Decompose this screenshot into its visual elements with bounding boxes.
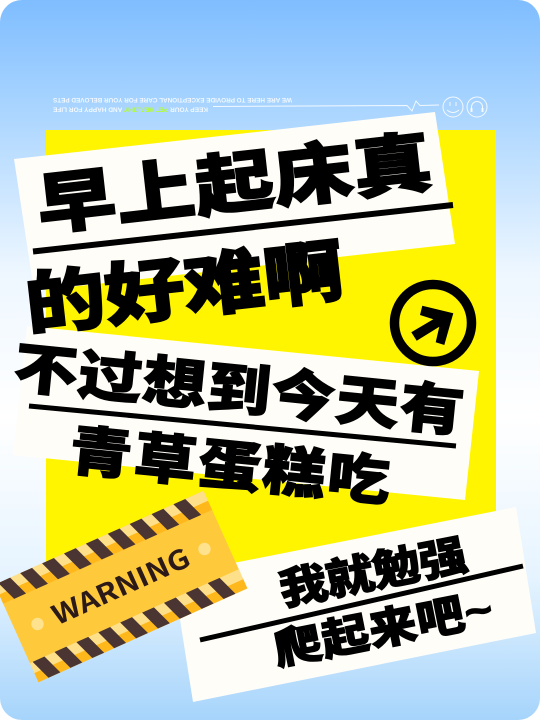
heading: 青草蛋糕吃: 青草蛋糕吃 (67, 421, 393, 513)
bottom hazard band (30, 569, 247, 682)
paper: middle (13, 326, 479, 500)
tagline: healthy pet: KEEP YOUR PET HEALTHY AND HAPPY FOR LIFE (52, 105, 208, 112)
heading: 我就勉强: 我就勉强 (275, 530, 471, 615)
icon: headphones (467, 97, 487, 117)
paper: bottom (173, 507, 536, 702)
rivet right (196, 541, 213, 557)
upside-down tagline strip (52, 96, 487, 117)
rivet left (29, 616, 46, 632)
heartbeat line (213, 101, 439, 111)
yellow panel (46, 130, 496, 600)
warning sign (0, 491, 247, 682)
heading: 的好难啊: 的好难啊 (22, 232, 347, 344)
heading: 早上起床真: 早上起床真 (33, 126, 436, 244)
icon: smiley (443, 97, 463, 117)
heading: 不过想到今天有: 不过想到今天有 (11, 337, 467, 443)
heading: 爬起来吧~: 爬起来吧~ (270, 584, 497, 675)
icon: circled arrow (394, 284, 472, 362)
tagline: care statement: WE ARE HERE TO PROVIDE EXCEPTIONAL CARE FOR YOUR BELOVED PETS (52, 96, 292, 103)
top hazard band (0, 491, 212, 604)
warning label: WARNING (45, 537, 196, 633)
rule two (29, 406, 456, 446)
paper: headline top (14, 112, 455, 291)
rule one (33, 205, 453, 252)
rule three (200, 566, 523, 640)
